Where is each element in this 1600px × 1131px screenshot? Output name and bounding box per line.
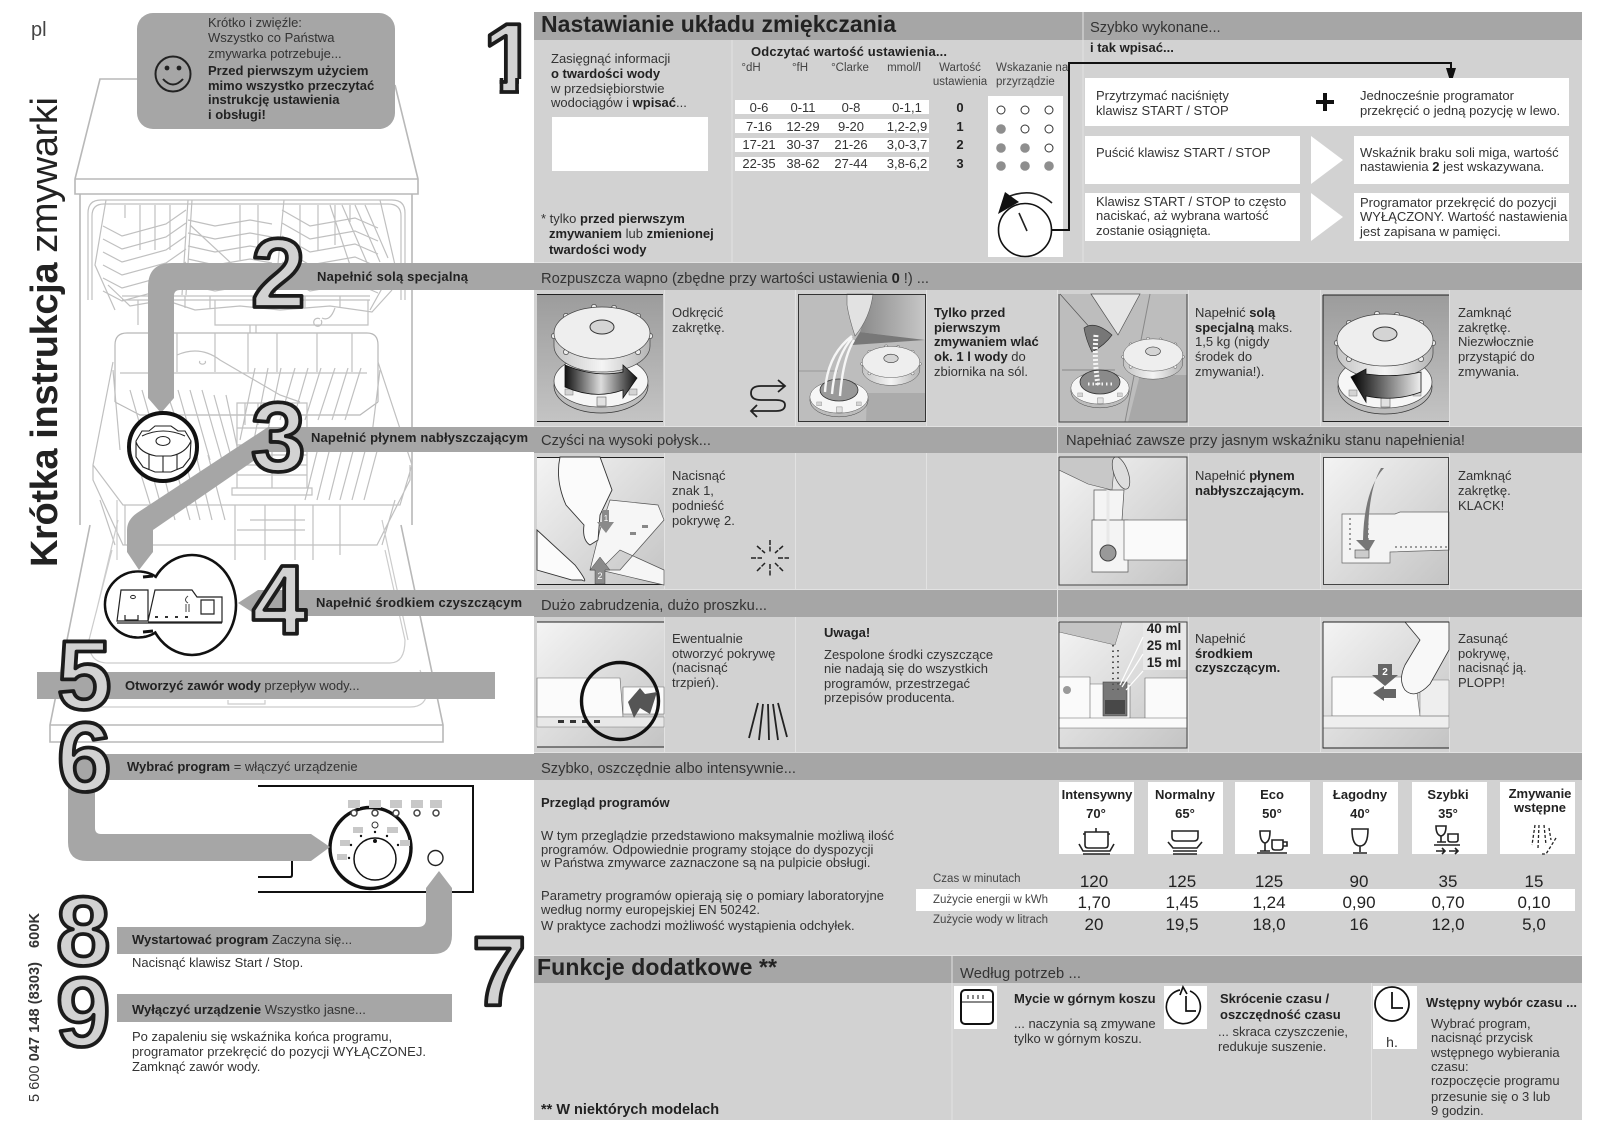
program columns: Zmywanie	[1509, 786, 1571, 801]
program data table: 1,45	[1165, 893, 1199, 912]
hardness table: Wskazanie na	[996, 62, 1069, 74]
text: close cap: zmywania.	[1458, 364, 1519, 379]
text: close detergent flap: pokrywę,	[1458, 646, 1510, 661]
program data table: 20	[1085, 915, 1103, 934]
step texts: Klawisz START / STOP to często	[1096, 194, 1286, 209]
step labels: Po zapaleniu się wskaźnika końca programu,	[132, 1029, 392, 1044]
text: pour rinse aid: nabłyszczającym.	[1195, 483, 1304, 498]
program columns: 70°	[1086, 806, 1106, 821]
callout text: Krótko i zwięźle:	[208, 15, 302, 30]
section: programs	[540, 761, 1575, 934]
number 8: 8	[56, 876, 111, 986]
icon: time reduction	[1164, 986, 1207, 1029]
hardness table: 22-35	[742, 156, 776, 171]
dishwasher line drawing	[50, 79, 443, 742]
text: open detergent flap: (nacisnąć	[672, 660, 728, 675]
step labels: Wystartować program Zaczyna się...	[132, 932, 352, 947]
language code: pl	[31, 19, 47, 41]
hardness table: 1,2-2,9	[887, 119, 927, 134]
icon: swap arrows	[751, 380, 785, 417]
text: fill detergent: środkiem	[1195, 646, 1253, 661]
text: time reduction	[1218, 991, 1348, 1054]
text: fill detergent: czyszczącym.	[1195, 660, 1280, 675]
hardness table: 30-37	[786, 137, 820, 152]
right panel background	[534, 12, 1582, 1120]
program columns	[1059, 782, 1575, 854]
hardness table: 0	[956, 100, 964, 115]
image: open rinse flap	[537, 457, 664, 585]
image: open rinse flap: 1	[604, 514, 609, 523]
step texts	[1096, 88, 1568, 239]
text: add salt: zmywania!).	[1195, 364, 1264, 379]
hardness table: °fH	[792, 62, 808, 74]
programs description: Przegląd programów	[541, 795, 670, 810]
section: additional functions: Według potrzeb ...	[960, 966, 1081, 982]
text: close rinse flap	[1458, 468, 1512, 513]
text: delay timer: czasu:	[1431, 1059, 1469, 1074]
text: close rinse flap: Zamknąć	[1458, 468, 1512, 483]
program columns: 35°	[1438, 806, 1458, 821]
text: delay timer: wstępnego wybierania	[1430, 1045, 1560, 1060]
number 5: 5	[57, 620, 112, 730]
text: close detergent flap: Zasunąć	[1458, 631, 1508, 646]
icon: delay timer	[1373, 986, 1417, 1050]
program data table: Zużycie energii w kWh	[933, 894, 1048, 906]
text: unscrew	[672, 305, 725, 335]
text: open detergent flap: Ewentualnie	[672, 631, 743, 646]
text: delay timer: rozpoczęcie programu	[1431, 1073, 1560, 1088]
program data table: 19,5	[1165, 915, 1199, 934]
text: delay timer: Wstępny wybór czasu ...	[1426, 995, 1577, 1010]
program columns: Normalny	[1155, 787, 1216, 802]
step labels: Napełnić środkiem czyszczącym	[316, 595, 522, 610]
section: detergent: Dużo zabrudzenia, dużo proszku...	[541, 598, 767, 614]
section: quick setting steps: Szybko wykonane...	[1090, 20, 1221, 36]
icon: programmer knob	[998, 192, 1052, 256]
footnote: zmywaniem lub zmienionej	[549, 226, 714, 241]
water hardness text: wodociągów i wpisać...	[550, 95, 687, 110]
program data table: 0,10	[1517, 893, 1551, 912]
hardness table: przyrządzie	[996, 76, 1055, 88]
image: add salt	[1059, 294, 1187, 422]
text: upper basket: tylko w górnym koszu.	[1014, 1031, 1142, 1046]
step texts: Wskaźnik braku soli miga, wartość	[1360, 145, 1559, 160]
text: add salt: specjalną maks.	[1195, 320, 1293, 335]
text: close cap	[1458, 305, 1535, 379]
white write-in box	[552, 117, 708, 171]
program data table: 125	[1168, 872, 1196, 891]
control panel drawing	[258, 786, 473, 892]
program data table: 15	[1525, 872, 1543, 891]
step labels: Napełnić solą specjalną	[317, 269, 469, 284]
program data table: Czas w minutach	[933, 873, 1021, 885]
step labels: Otworzyć zawór wody przepływ wody...	[125, 678, 360, 693]
number 6: 6	[57, 702, 112, 812]
text: open detergent flap	[672, 631, 775, 690]
text: open rinse flap: znak 1,	[672, 483, 714, 498]
number 1	[488, 22, 522, 94]
program data table: 0,70	[1431, 893, 1465, 912]
hardness table: 12-29	[786, 119, 820, 134]
text: close detergent flap: nacisnąć ją.	[1458, 660, 1527, 675]
section: rinse aid	[537, 433, 1512, 585]
text: delay timer: 9 godzin.	[1431, 1103, 1484, 1118]
icon: delay timer: h.	[1386, 1034, 1398, 1050]
icon: quick program	[1434, 826, 1460, 854]
text: pour water: zbiornika na sól.	[934, 364, 1028, 379]
text: close rinse flap: KLACK!	[1458, 498, 1504, 513]
image: open rinse flap: 2	[597, 571, 603, 581]
image: pour water	[798, 294, 926, 422]
image: open detergent flap	[537, 622, 664, 747]
programs description: W praktyce zachodzi możliwość wystąpienia odchyłek.	[541, 918, 855, 933]
text: upper basket: ... naczynia są zmywane	[1014, 1016, 1156, 1031]
hardness table: ustawienia	[933, 76, 988, 88]
text: unscrew: zakrętkę.	[672, 320, 725, 335]
number 7: 7	[472, 916, 527, 1026]
hardness table: 0-8	[842, 100, 860, 115]
text: open detergent flap: trzpień).	[672, 675, 719, 690]
image: fill detergent: 15 ml	[1147, 655, 1181, 670]
step labels: Zamknąć zawór wody.	[132, 1059, 260, 1074]
step texts: naciskać, aż wybrana wartość	[1096, 208, 1269, 223]
indicator column	[988, 96, 1063, 257]
program data table: 1,70	[1077, 893, 1111, 912]
text: pour water	[934, 305, 1039, 379]
text: open rinse flap: pokrywę 2.	[672, 513, 735, 528]
text: close cap: zakrętkę.	[1458, 320, 1511, 335]
arrow bar: step 4	[238, 590, 534, 616]
step texts: klawisz START / STOP	[1096, 103, 1229, 118]
connector line with arrow	[1052, 63, 1456, 230]
image: pour rinse aid	[1059, 455, 1187, 585]
section: additional functions	[537, 954, 1577, 1118]
icon: upper basket	[954, 986, 997, 1029]
program data table: 125	[1255, 872, 1283, 891]
text: unscrew: Odkręcić	[672, 305, 724, 320]
program columns: wstępne	[1513, 800, 1566, 815]
number 2: 2	[251, 218, 306, 328]
text: time reduction: Skrócenie czasu /	[1220, 991, 1329, 1006]
text: open detergent flap: otworzyć pokrywę	[672, 646, 775, 661]
warning note: Uwaga!	[824, 625, 870, 640]
icon: pre-wash spray	[1532, 825, 1556, 854]
program data table: Zużycie wody w litrach	[933, 914, 1048, 926]
text: fill detergent	[1195, 631, 1280, 675]
callout text: Przed pierwszym użyciem	[208, 63, 368, 78]
footnote	[541, 211, 714, 257]
program data table: 16	[1350, 915, 1368, 934]
heading: Nastawianie układu zmiękczania	[541, 11, 896, 37]
callout text: instrukcję ustawienia	[208, 92, 340, 107]
step labels: Wyłączyć urządzenie Wszystko jasne...	[132, 1002, 366, 1017]
callout text: i obsługi!	[208, 107, 266, 122]
water hardness text: w przedsiębiorstwie	[550, 81, 664, 96]
text: close cap: przystąpić do	[1458, 349, 1535, 364]
text: add salt	[1195, 305, 1293, 379]
section: salt: Rozpuszcza wapno (zbędne przy wartości ustawienia 0 !) ...	[541, 271, 929, 287]
bar: step 5	[37, 672, 495, 699]
white step boxes	[1085, 78, 1569, 241]
hardness table: °Clarke	[831, 62, 869, 74]
hardness table: 3,0-3,7	[887, 137, 927, 152]
footnote: * tylko przed pierwszym	[541, 211, 685, 226]
image: close cap	[1323, 295, 1449, 422]
icon: dispenser in double circle	[105, 555, 236, 655]
text: time reduction: ... skraca czyszczenie,	[1218, 1024, 1348, 1039]
section: rinse aid: Czyści na wysoki połysk...	[541, 433, 711, 449]
hardness table: 2	[956, 137, 964, 152]
callout text: zmywarka potrzebuje...	[208, 46, 342, 61]
hardness table: 7-16	[746, 119, 772, 134]
part number: 600K	[27, 912, 43, 948]
text: delay timer: przesunie się o 3 lub	[1431, 1089, 1550, 1104]
program data table	[916, 872, 1575, 934]
program data table: 0,90	[1342, 893, 1376, 912]
text: open rinse flap: podnieść	[672, 498, 725, 513]
hardness table: 9-20	[838, 119, 864, 134]
program data table: 1,24	[1252, 893, 1286, 912]
image: fill detergent	[1059, 621, 1187, 748]
hardness table: 3	[956, 156, 964, 171]
step texts: Programator przekręcić do pozycji	[1360, 195, 1557, 210]
part number: 5 600 047 148 (8303)	[27, 962, 43, 1102]
callout text: mimo wszystko przeczytać	[208, 78, 374, 93]
text: close detergent flap	[1458, 631, 1527, 690]
text: add salt: Napełnić solą	[1195, 305, 1276, 320]
text: fill detergent: Napełnić	[1195, 631, 1246, 646]
water hardness text	[550, 51, 687, 110]
text: close cap: Zamknąć	[1458, 305, 1512, 320]
arrow bar: step 8	[117, 871, 452, 954]
step labels: Nacisnąć klawisz Start / Stop.	[132, 955, 303, 970]
text: add salt: środek do	[1195, 349, 1252, 364]
arrow bar: step 3	[127, 427, 534, 570]
hardness table: 17-21	[742, 137, 776, 152]
hardness table: mmol/l	[887, 62, 921, 74]
text: open rinse flap	[672, 468, 735, 528]
section: rinse aid: Napełniać zawsze przy jasnym wskaźniku stanu napełnienia!	[1066, 433, 1465, 449]
icon: glass and cup	[1257, 831, 1287, 853]
section: programs: Szybko, oszczędnie albo intensywnie...	[541, 761, 796, 777]
number 1: 1	[483, 3, 538, 113]
text: time reduction: redukuje suszenie.	[1218, 1039, 1326, 1054]
callout text	[208, 15, 374, 122]
program columns: Eco	[1260, 787, 1284, 802]
warning note: przepisów producenta.	[824, 690, 955, 705]
program columns: Szybki	[1427, 787, 1469, 802]
warning note: nie nadają się do wszystkich	[824, 661, 988, 676]
text: upper basket	[1014, 991, 1156, 1046]
step texts: nastawienia 2 jest wskazywana.	[1360, 159, 1544, 174]
text: pour water: zmywaniem wlać	[934, 334, 1039, 349]
program data table: 12,0	[1431, 915, 1465, 934]
image: fill detergent: 25 ml	[1147, 638, 1181, 653]
step labels: Napełnić płynem nabłyszczającym	[311, 430, 528, 445]
section: salt	[537, 271, 1535, 422]
icon: rinse sparkle	[751, 540, 789, 577]
step texts: WYŁĄCZONY. Wartość nastawienia	[1360, 209, 1568, 224]
step labels: Wybrać program = włączyć urządzenie	[127, 759, 358, 774]
text: upper basket: Mycie w górnym koszu	[1014, 991, 1156, 1006]
program columns: 40°	[1350, 806, 1370, 821]
programs description: Parametry programów opierają się o pomiary laboratoryjne	[541, 888, 884, 903]
hardness table: 0-11	[790, 100, 816, 115]
arrow bar: step 6	[68, 754, 534, 861]
step texts: Przytrzymać naciśnięty	[1096, 88, 1229, 103]
text: pour water: ok. 1 l wody do	[934, 349, 1026, 364]
footnote: twardości wody	[549, 242, 647, 257]
hardness table: 3,8-6,2	[887, 156, 927, 171]
program data table: 5,0	[1522, 915, 1546, 934]
text: delay timer: Wybrać program,	[1431, 1016, 1531, 1031]
section: detergent	[537, 598, 1527, 748]
program data table: 18,0	[1252, 915, 1286, 934]
arrow bar: step 2	[148, 263, 534, 413]
hardness table: 0-6	[750, 100, 768, 115]
hardness table: 21-26	[834, 137, 868, 152]
image: fill detergent: 40 ml	[1147, 621, 1181, 636]
programs description: programów. Odpowiednie programy stojące do dyspozycji	[541, 842, 874, 857]
program data table: 90	[1350, 872, 1368, 891]
water hardness text: Zasięgnąć informacji	[551, 51, 670, 66]
number 9: 9	[56, 957, 111, 1067]
programs description	[540, 795, 894, 933]
vertical title: Krótka instrukcja zmywarki	[24, 97, 66, 567]
text: pour rinse aid: Napełnić płynem	[1195, 468, 1295, 483]
text: close rinse flap: zakrętkę.	[1458, 483, 1511, 498]
step labels	[125, 269, 528, 1074]
text: time reduction: oszczędność czasu	[1220, 1007, 1341, 1022]
step labels: programator przekręcić do pozycji WYŁĄCZONEJ.	[132, 1044, 426, 1059]
image: close detergent flap	[1323, 622, 1449, 748]
icon: salt cap in circle	[129, 413, 197, 481]
text: close cap: Niezwłocznie	[1458, 334, 1534, 349]
hardness table: Wartość	[939, 62, 981, 74]
icon: smiley	[156, 56, 190, 92]
programs description: W tym przeglądzie przedstawiono maksymalnie możliwą ilość	[541, 828, 894, 843]
icon: wine glass	[1352, 829, 1368, 853]
text: open rinse flap: Nacisnąć	[672, 468, 726, 483]
section: quick setting steps	[1085, 20, 1569, 241]
step texts: Puścić klawisz START / STOP	[1096, 145, 1271, 160]
section: additional functions: ** W niektórych modelach	[541, 1102, 719, 1118]
program data table: 120	[1080, 872, 1108, 891]
hardness table: 0-1,1	[892, 100, 922, 115]
program columns: Łagodny	[1333, 787, 1388, 802]
program columns: 65°	[1175, 806, 1195, 821]
warning note	[824, 625, 993, 705]
text: delay timer: nacisnąć przycisk	[1431, 1030, 1533, 1045]
step texts: jest zapisana w pamięci.	[1359, 224, 1501, 239]
number 4: 4	[252, 545, 307, 655]
image: close detergent flap: 2	[1382, 667, 1388, 678]
step texts: zostanie osiągnięta.	[1096, 223, 1211, 238]
program data table: 35	[1439, 872, 1457, 891]
icon: plates	[1168, 831, 1202, 854]
text: pour water: Tylko przed	[934, 305, 1005, 320]
bar: step 9	[117, 994, 452, 1022]
icon: pot	[1079, 828, 1114, 854]
hardness table: Odczytać wartość ustawienia...	[751, 44, 947, 59]
text: add salt: 1,5 kg (nigdy	[1195, 334, 1270, 349]
hardness table: 27-44	[834, 156, 868, 171]
image: close rinse flap	[1323, 457, 1449, 585]
water hardness text: o twardości wody	[551, 66, 661, 81]
warning note: Zespolone środki czyszczące	[824, 647, 993, 662]
section: quick setting steps: i tak wpisać...	[1090, 40, 1174, 55]
program columns: 50°	[1262, 806, 1282, 821]
text: delay timer	[1426, 995, 1577, 1118]
callout: read instructions	[137, 13, 395, 129]
hardness table: 38-62	[786, 156, 820, 171]
warning note: programów, przestrzegać	[824, 676, 970, 691]
section: softener setting	[541, 11, 1456, 257]
hardness table: 1	[956, 119, 964, 134]
program columns: Intensywny	[1062, 787, 1133, 802]
number 3: 3	[251, 382, 306, 492]
image: unscrew cap	[537, 294, 663, 422]
hardness table	[735, 44, 1069, 171]
step texts: przekręcić o jedną pozycję w lewo.	[1360, 103, 1560, 118]
callout text: Wszystko co Państwa	[208, 30, 335, 45]
text: pour rinse aid	[1195, 468, 1304, 498]
section: additional functions: Funkcje dodatkowe **	[537, 954, 777, 980]
text: pour water: pierwszym	[934, 320, 1000, 335]
icon: spray jets	[749, 703, 787, 740]
text: close detergent flap: PLOPP!	[1458, 675, 1505, 690]
programs description: według normy europejskiej EN 50242.	[540, 902, 760, 917]
programs description: w Państwa zmywarce zaznaczone są na pulpicie obsługi.	[540, 855, 871, 870]
step texts: Jednocześnie programator	[1360, 88, 1515, 103]
hardness table: °dH	[741, 62, 761, 74]
